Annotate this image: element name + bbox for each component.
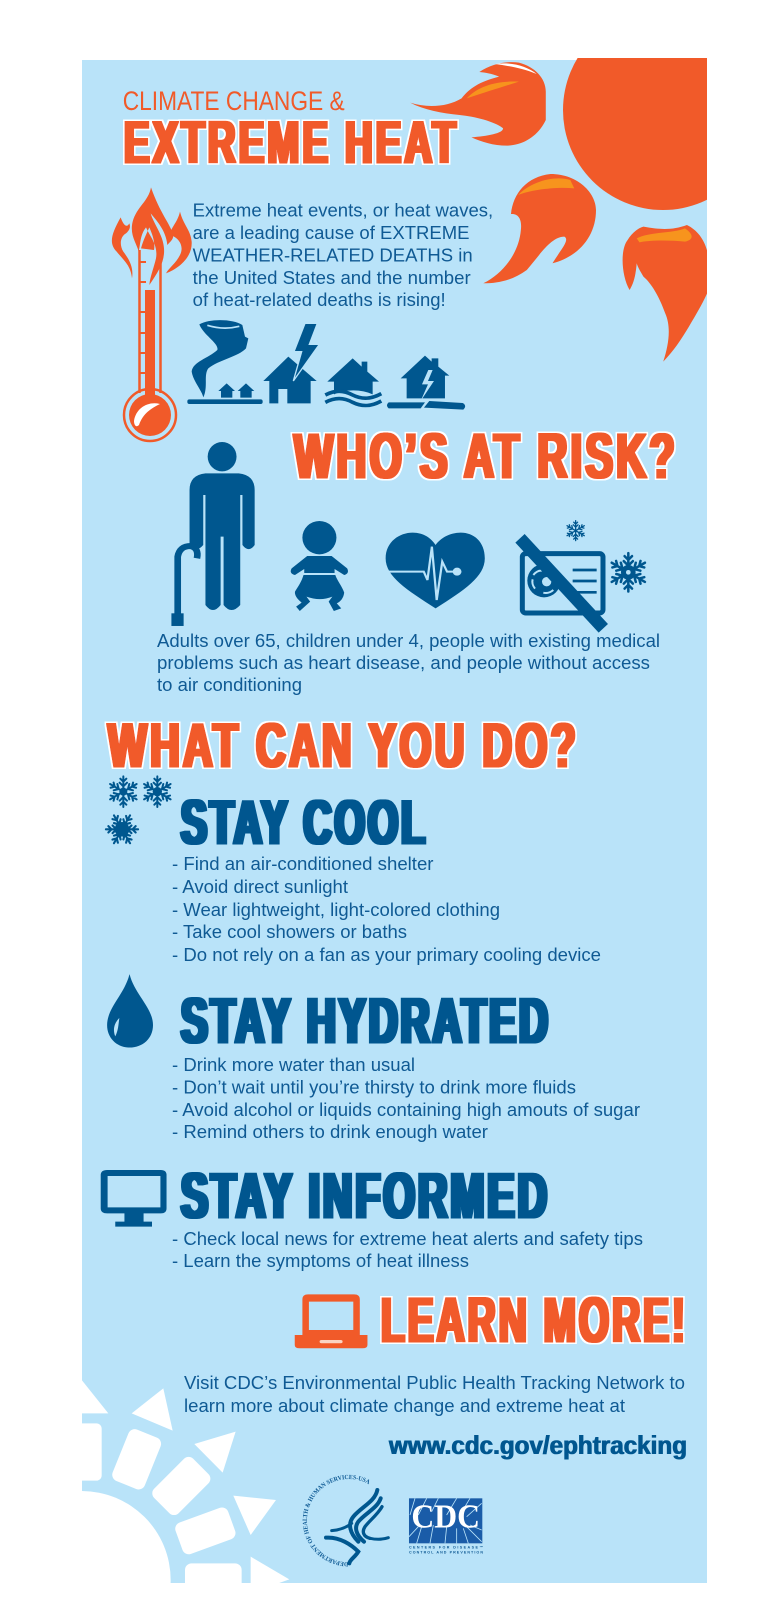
text block: visit cdc: learn more about climate change and extreme heat at — [184, 1396, 625, 1416]
heading: stay cool: STAY COOL — [181, 788, 428, 858]
icon: laptop — [295, 1294, 367, 1348]
decorative white sun, bottom left — [82, 1380, 290, 1583]
icon: middle flame — [483, 174, 596, 283]
heading: stay hydrated: STAY HYDRATED — [181, 984, 551, 1057]
cdc caption — [409, 1546, 483, 1555]
text block: who's at risk description — [157, 631, 660, 695]
icon: sun disc — [563, 58, 707, 210]
sun with flames — [410, 58, 707, 362]
cdc caption: CENTERS FOR DISEASE™ — [409, 1546, 483, 1550]
list: stay cool tips: - Do not rely on a fan as your primary cooling device — [172, 945, 601, 965]
icon: large snowflake — [609, 553, 647, 591]
list: stay cool tips: - Find an air-conditioned shelter — [172, 854, 434, 874]
icon: house with lightning — [263, 323, 319, 403]
heading: stay informed: STAY INFORMED — [181, 1159, 550, 1232]
text block: visit cdc — [184, 1373, 685, 1416]
text block: who's at risk description: problems such as heart disease, and people without access — [157, 653, 650, 673]
icon: top flame — [410, 62, 546, 146]
text block: visit cdc: Visit CDC’s Environmental Public Health Tracking Network to — [184, 1373, 685, 1393]
cdc letters: CDC — [411, 1498, 480, 1535]
icon: computer monitor — [101, 1170, 167, 1227]
list: stay hydrated tips: - Remind others to drink enough water — [172, 1122, 488, 1142]
logo: cdc — [409, 1498, 483, 1555]
text block: who's at risk description: to air conditioning — [157, 675, 302, 695]
cdc blue square — [409, 1498, 482, 1543]
list: stay hydrated tips: - Don’t wait until you’re thirsty to drink more fluids — [172, 1078, 576, 1098]
icon: thin snowflake — [108, 776, 138, 807]
icons: at-risk groups — [171, 442, 485, 626]
list: stay hydrated tips — [172, 1055, 640, 1142]
logo: department of health and human services — [302, 1474, 390, 1566]
icon: crossed out air conditioner with snowflakes — [520, 521, 647, 628]
thermometer bulb — [124, 389, 176, 441]
eagle — [326, 1490, 388, 1563]
air conditioner unit — [522, 554, 603, 613]
icons: three snowflakes — [100, 776, 172, 851]
flames on thermometer — [112, 187, 192, 285]
title line: extreme heat: EXTREME HEAT — [124, 109, 459, 176]
icon: snowflake bottom — [100, 807, 144, 851]
title — [123, 86, 459, 176]
text block: intro: of heat-related deaths is rising! — [193, 290, 446, 310]
panel: light blue background — [82, 60, 707, 1583]
list: stay cool tips — [172, 854, 601, 965]
icon: water drop — [107, 974, 153, 1048]
thermometer tube — [139, 250, 160, 393]
text block: intro — [193, 200, 493, 310]
text block: intro: the United States and the number — [193, 268, 471, 288]
icons: extreme weather — [187, 320, 465, 410]
link: cdc url: www.cdc.gov/ephtracking — [388, 1430, 687, 1460]
text block: intro: WEATHER-RELATED DEATHS in — [193, 246, 473, 266]
title line: climate change: CLIMATE CHANGE & — [123, 86, 345, 116]
icon: elderly person with cane — [171, 442, 255, 626]
list: stay cool tips: - Wear lightweight, light-colored clothing — [172, 900, 500, 920]
text block: intro: are a leading cause of EXTREME — [193, 223, 469, 243]
section: stay cool — [172, 788, 601, 965]
list: stay hydrated tips: - Drink more water than usual — [172, 1055, 415, 1075]
icon: heart with pulse — [386, 533, 485, 608]
icon: thermometer with flames — [112, 187, 192, 441]
cdc caption: CONTROL AND PREVENTION — [409, 1551, 483, 1555]
icon: snowflake right — [142, 776, 172, 807]
list: stay cool tips: - Avoid direct sunlight — [172, 877, 348, 897]
list: stay informed tips: - Learn the symptoms of heat illness — [172, 1251, 469, 1271]
sun disc — [82, 1491, 171, 1583]
icon: earthquake house — [387, 356, 465, 410]
section: stay informed — [172, 1159, 643, 1271]
icon: baby — [291, 521, 348, 611]
list: stay informed tips — [172, 1229, 643, 1271]
section: stay hydrated — [172, 984, 640, 1142]
icon: small snowflake — [566, 521, 585, 541]
icon: tornado — [187, 320, 263, 404]
sun rays — [82, 1380, 290, 1583]
text block: who's at risk description: Adults over 65, children under 4, people with existing medical — [157, 631, 660, 651]
icon: flooded house — [325, 358, 381, 406]
list: stay cool tips: - Take cool showers or baths — [172, 922, 407, 942]
list: stay hydrated tips: - Avoid alcohol or liquids containing high amouts of sugar — [172, 1100, 640, 1120]
slash — [520, 538, 603, 628]
text block: intro: Extreme heat events, or heat waves, — [193, 200, 493, 220]
icon: lower flame — [623, 225, 709, 362]
list: stay informed tips: - Check local news for extreme heat alerts and safety tips — [172, 1229, 643, 1249]
seal text: DEPARTMENT OF HEALTH & HUMAN SERVICES-USA — [302, 1474, 370, 1566]
